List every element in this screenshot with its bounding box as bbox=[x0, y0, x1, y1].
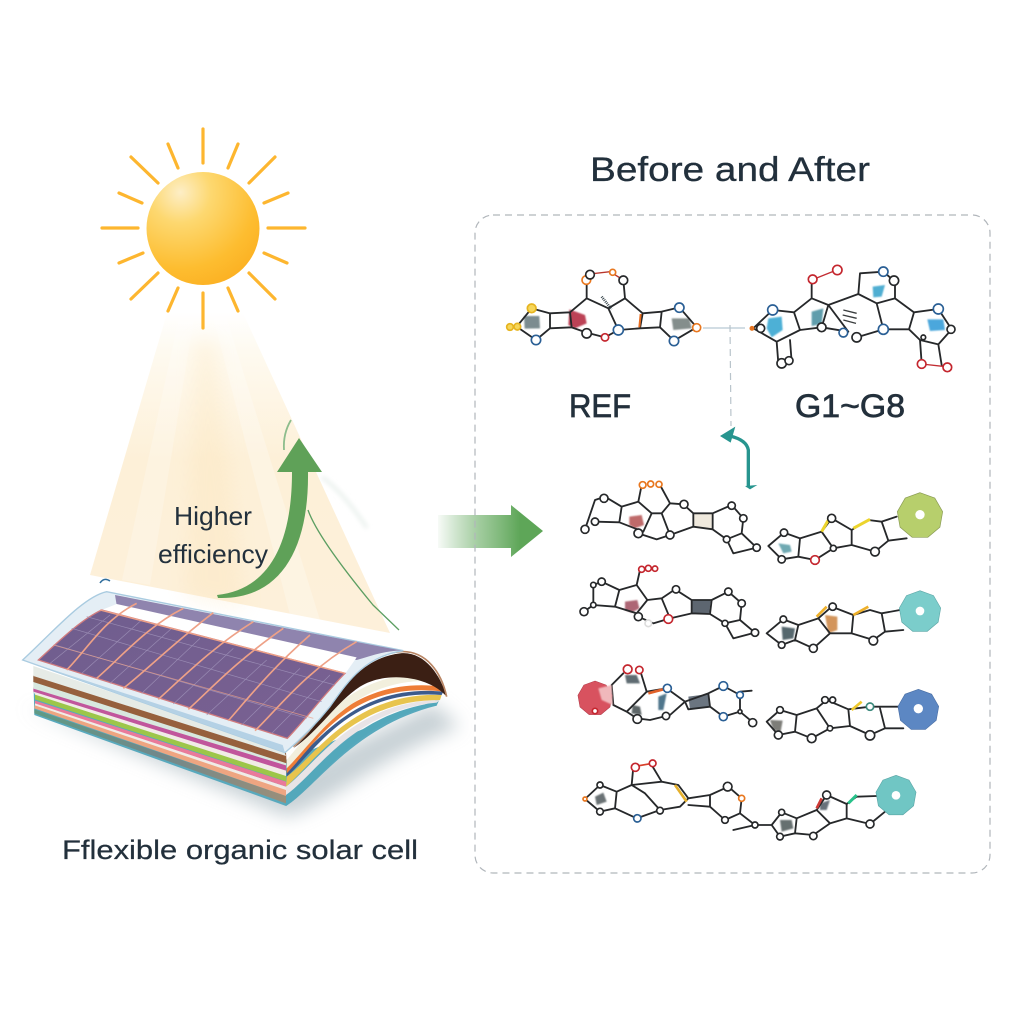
white strip bbox=[102, 604, 357, 674]
label: higher efficiency: efficiency bbox=[158, 539, 268, 569]
panel grid lines bbox=[50, 615, 335, 733]
heading: Before and After bbox=[590, 151, 870, 189]
layered stack bbox=[33, 652, 447, 806]
molecule row 3 bbox=[578, 665, 939, 743]
light beam bbox=[90, 313, 390, 633]
label: G1~G8: G1~G8 bbox=[795, 388, 905, 424]
thin green stem bbox=[284, 420, 399, 630]
molecule row 1 bbox=[581, 481, 943, 564]
illustration: flexible solar cell bbox=[23, 592, 460, 817]
cell shadow bbox=[23, 703, 460, 817]
label: REF: REF bbox=[569, 388, 631, 424]
panel: before and after bbox=[475, 215, 990, 873]
icon: sun bbox=[102, 129, 305, 328]
orange dividers bbox=[53, 603, 357, 731]
caption: Fflexible organic solar cell bbox=[62, 835, 418, 865]
molecule: REF bbox=[507, 269, 701, 346]
label: higher efficiency: Higher bbox=[174, 501, 252, 531]
arrow: before to after bbox=[438, 505, 543, 557]
small curl mark bbox=[100, 579, 110, 583]
label: higher efficiency bbox=[158, 501, 268, 569]
molecule: G1~G8 bbox=[750, 265, 955, 372]
glass top sheet bbox=[23, 592, 403, 753]
connector lines bbox=[703, 325, 745, 426]
purple solar panel bbox=[38, 610, 345, 738]
arrow: higher efficiency bbox=[217, 438, 322, 598]
molecule row 4 bbox=[583, 760, 916, 840]
dark interior bbox=[293, 653, 447, 748]
molecule row 2 bbox=[580, 565, 941, 652]
arrow: teal return bbox=[720, 427, 757, 489]
purple band bbox=[115, 595, 402, 660]
curved side layers bbox=[286, 703, 437, 806]
